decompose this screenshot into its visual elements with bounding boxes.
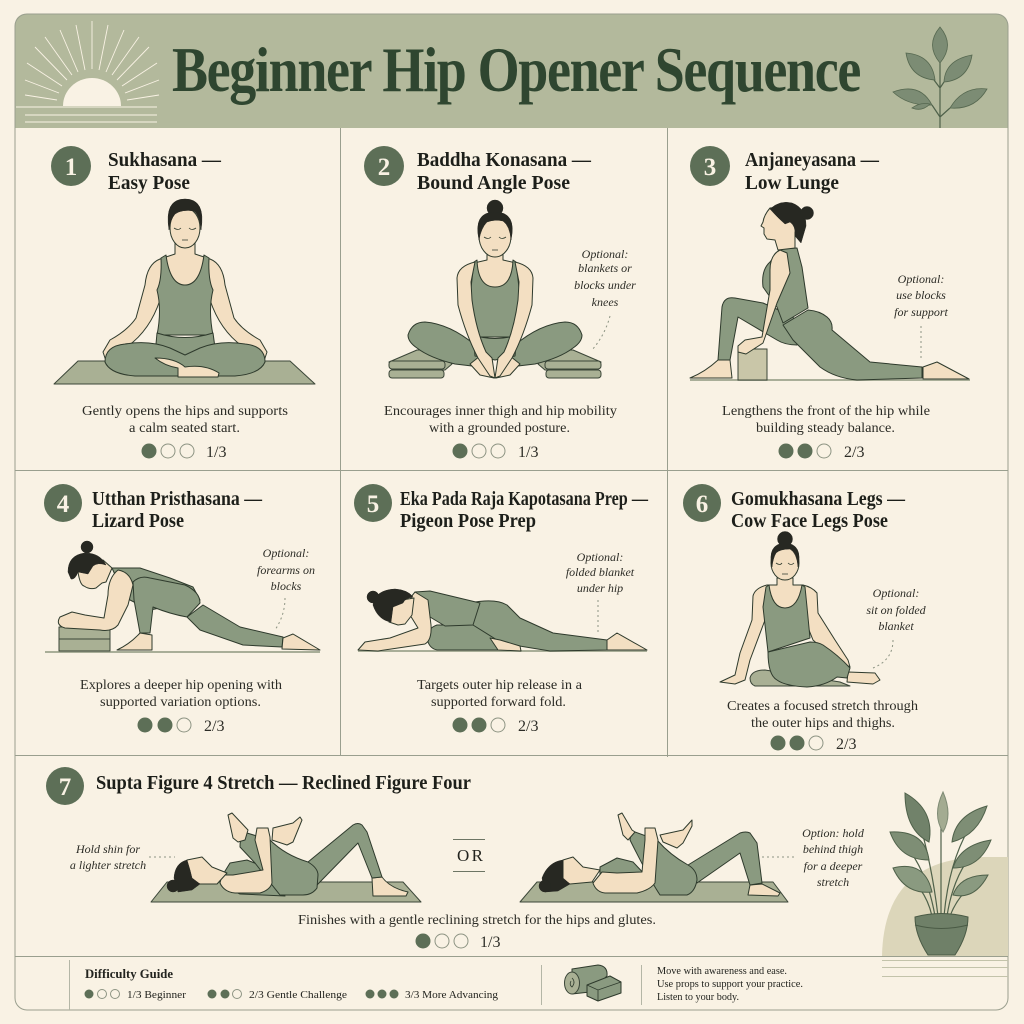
legend: beginner xyxy=(84,989,186,1001)
badge 3: 3 xyxy=(704,154,716,181)
description 4: supported variation options. xyxy=(100,695,261,710)
illustration: reclined figure four, thigh hold xyxy=(520,813,788,902)
legend: gentle challenge: 2/3 Gentle Challenge xyxy=(249,989,347,1001)
difficulty rating 1/3: 1/3 xyxy=(480,934,500,951)
description 1: a calm seated start. xyxy=(129,421,240,436)
callout: folded blanket seat: blanket xyxy=(878,619,914,633)
illustration: reclined figure four, shin hold xyxy=(151,813,421,902)
description 6: the outer hips and thighs. xyxy=(751,716,895,731)
description 4: Explores a deeper hip opening with xyxy=(80,678,282,693)
heading 4: Lizard Pose xyxy=(92,511,184,532)
difficulty rating 2/3 xyxy=(452,718,538,735)
heading 5: Pigeon Pose Prep xyxy=(400,511,536,532)
legend: more advancing: 3/3 More Advancing xyxy=(405,989,499,1001)
description 6 xyxy=(727,699,918,731)
description 5 xyxy=(417,678,583,710)
callout: use blocks: use blocks xyxy=(896,288,946,302)
callout: hold behind thigh: stretch xyxy=(817,875,849,889)
callout: hold shin: Hold shin for xyxy=(75,842,140,856)
callout: hold behind thigh: Option: hold xyxy=(802,826,865,840)
description 6: Creates a focused stretch through xyxy=(727,699,918,714)
heading 3: Anjaneyasana — xyxy=(745,150,879,171)
callout: hold shin: a lighter stretch xyxy=(70,858,146,872)
heading 2: Baddha Konasana — xyxy=(417,150,591,171)
heading 6: Cow Face Legs Pose xyxy=(731,511,888,532)
difficulty rating 1/3: 1/3 xyxy=(206,444,226,461)
panel: pose 7 xyxy=(46,767,865,951)
callout: hold shin xyxy=(70,842,175,872)
callout: folded blanket: folded blanket xyxy=(566,565,635,579)
illustration: bound angle pose with blankets xyxy=(389,200,601,378)
badge 5 xyxy=(354,484,392,522)
badge 4: 4 xyxy=(57,491,70,518)
badge 2 xyxy=(364,146,404,186)
badge 3 xyxy=(690,146,730,186)
callout: hold behind thigh: behind thigh xyxy=(803,842,863,856)
description 2: with a grounded posture. xyxy=(429,421,570,436)
description 1: Gently opens the hips and supports xyxy=(82,404,288,419)
illustration: low lunge with block xyxy=(690,202,970,380)
difficulty rating 1/3 xyxy=(452,444,538,461)
reminder text xyxy=(657,966,803,1003)
badge 5: 5 xyxy=(367,491,379,518)
callout: forearms on blocks: forearms on xyxy=(257,563,315,577)
illustration: easy pose xyxy=(54,199,315,384)
panel: pose 6 xyxy=(683,484,927,753)
callout: folded blanket: under hip xyxy=(577,581,623,595)
reminder text: Move with awareness and ease. xyxy=(657,966,787,977)
callout: folded blanket seat: Optional: xyxy=(873,586,919,600)
difficulty rating 2/3: 2/3 xyxy=(204,718,224,735)
badge 1 xyxy=(51,146,91,186)
legend: more advancing xyxy=(366,989,499,1001)
callout: use blocks: Optional: xyxy=(898,272,944,286)
icon: header leaf sprig xyxy=(893,27,987,128)
heading 2: Bound Angle Pose xyxy=(417,173,570,194)
panel: pose 1 xyxy=(51,146,315,461)
panel: pose 4 xyxy=(44,484,320,735)
heading 6: Gomukhasana Legs — xyxy=(731,489,905,510)
description 3: Lengthens the front of the hip while xyxy=(722,404,930,419)
OR divider: OR xyxy=(457,846,484,865)
description 7: Finishes with a gentle reclining stretch for the hips and glutes. xyxy=(298,913,656,928)
difficulty rating 1/3 xyxy=(416,934,500,951)
difficulty rating 2/3: 2/3 xyxy=(518,718,538,735)
callout: hold behind thigh: for a deeper xyxy=(804,859,863,873)
heading 3: Low Lunge xyxy=(745,173,839,194)
panel: pose 2 xyxy=(364,146,636,461)
legend: beginner: 1/3 Beginner xyxy=(127,989,186,1001)
heading 6 xyxy=(731,489,905,532)
callout: optional blankets: knees xyxy=(592,295,619,309)
callout: folded blanket seat: sit on folded xyxy=(866,603,927,617)
callout: use blocks: for support xyxy=(894,305,948,319)
heading 1 xyxy=(108,150,221,194)
callout: forearms on blocks: Optional: xyxy=(263,546,309,560)
heading 1: Easy Pose xyxy=(108,173,190,194)
panel: pose 5 xyxy=(354,484,648,735)
description 3: building steady balance. xyxy=(756,421,895,436)
badge 2: 2 xyxy=(378,154,390,181)
reminder text: Use props to support your practice. xyxy=(657,979,803,990)
panel: pose 3 xyxy=(690,146,970,461)
OR divider xyxy=(453,840,485,872)
difficulty rating 2/3 xyxy=(138,718,224,735)
difficulty rating 1/3 xyxy=(142,444,226,461)
heading 4: Utthan Pristhasana — xyxy=(92,489,262,510)
badge 4 xyxy=(44,484,82,522)
badge 7: 7 xyxy=(59,774,71,801)
badge 6: 6 xyxy=(696,491,708,518)
callout: optional blankets: blocks under xyxy=(574,278,636,292)
legend heading: Difficulty Guide xyxy=(85,967,173,981)
description 1 xyxy=(82,404,288,436)
difficulty rating 1/3: 1/3 xyxy=(518,444,538,461)
description 2: Encourages inner thigh and hip mobility xyxy=(384,404,617,419)
description 5: supported forward fold. xyxy=(431,695,566,710)
panel: difficulty guide footer xyxy=(84,965,803,1003)
heading 7: Supta Figure 4 Stretch — Reclined Figure Four xyxy=(96,773,471,794)
description 3 xyxy=(722,404,930,436)
description 2 xyxy=(384,404,617,436)
difficulty rating 2/3: 2/3 xyxy=(844,444,864,461)
callout: forearms on blocks xyxy=(257,546,315,630)
icon: rising sun xyxy=(16,21,159,122)
callout: folded blanket: Optional: xyxy=(577,550,623,564)
illustration: cow face legs pose xyxy=(720,532,880,687)
callout: optional blankets: blankets or xyxy=(578,261,632,275)
icon: potted plant xyxy=(882,792,1008,976)
callout: use blocks xyxy=(894,272,948,360)
illustration: lizard pose on blocks xyxy=(45,541,320,652)
header band xyxy=(15,14,1008,128)
heading 3 xyxy=(745,150,879,194)
callout: optional blankets: Optional: xyxy=(582,247,628,261)
difficulty rating 2/3 xyxy=(778,444,864,461)
difficulty rating 2/3 xyxy=(770,736,856,753)
badge 1: 1 xyxy=(65,154,77,181)
badge 7 xyxy=(46,767,84,805)
heading 5: Eka Pada Raja Kapotasana Prep — xyxy=(400,489,648,510)
badge 6 xyxy=(683,484,721,522)
reminder text: Listen to your body. xyxy=(657,992,739,1003)
description 5: Targets outer hip release in a xyxy=(417,678,583,693)
title: Beginner Hip Opener Sequence xyxy=(172,35,860,105)
heading 5 xyxy=(400,489,648,532)
legend: gentle challenge xyxy=(208,989,347,1001)
heading 2 xyxy=(417,150,591,194)
difficulty rating 2/3: 2/3 xyxy=(836,736,856,753)
callout: hold behind thigh xyxy=(762,826,865,889)
illustration: pigeon pose prep xyxy=(358,589,647,651)
callout: folded blanket xyxy=(566,550,635,632)
callout: optional blankets xyxy=(574,247,636,350)
callout: folded blanket seat xyxy=(866,586,927,668)
icon: rolled mat and block xyxy=(564,965,621,1001)
heading 1: Sukhasana — xyxy=(108,150,221,171)
callout: forearms on blocks: blocks xyxy=(271,579,302,593)
heading 4 xyxy=(92,489,262,532)
description 4 xyxy=(80,678,282,710)
